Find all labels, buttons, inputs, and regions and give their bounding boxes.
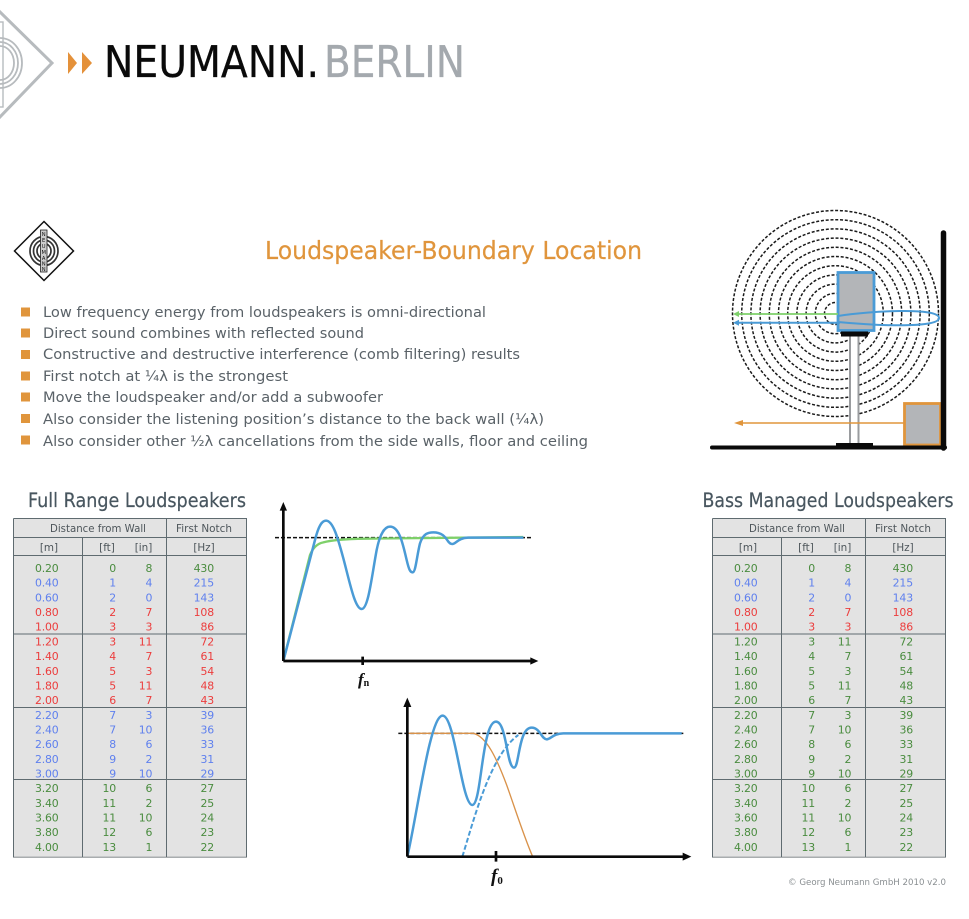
- table: bass managed: 7: [845, 606, 851, 619]
- table: full range: 3: [109, 635, 116, 648]
- table: full range: 2: [109, 606, 116, 619]
- table: full range: 10: [139, 812, 153, 825]
- table: full range: [Hz]: [193, 542, 215, 554]
- brand wordmark: arrows and NEUMANN.BERLIN: NEUMANN.: [104, 37, 319, 88]
- bullet list: Move the loudspeaker and/or add a subwoofer: [43, 389, 383, 406]
- table: bass managed: 11: [838, 679, 851, 692]
- table: full range: 27: [200, 782, 214, 795]
- table: full range: 4: [146, 577, 153, 590]
- table: bass managed: 36: [899, 724, 913, 736]
- table: full range: 4: [109, 650, 116, 663]
- table: bass managed: 2: [845, 797, 851, 810]
- bullet list: Also consider the listening position’s distance to the back wall (¼λ): [43, 411, 544, 428]
- table: full range: 54: [200, 665, 214, 678]
- table: full range: 31: [200, 753, 214, 766]
- table: full range: 8: [146, 562, 153, 575]
- table: full range: 2: [146, 797, 152, 810]
- table: full range: 43: [200, 694, 214, 707]
- table: full range: 1.00: [35, 621, 59, 634]
- table: full range: 0.20: [35, 562, 59, 575]
- table: bass managed: 33: [899, 738, 913, 751]
- table: bass managed: 5: [808, 665, 815, 678]
- table: full range: First Notch: [176, 523, 232, 535]
- table: bass managed: 0: [845, 591, 852, 604]
- table: full range: 12: [102, 826, 116, 839]
- table: bass managed: 3: [845, 621, 852, 634]
- table: bass managed: First Notch: [875, 523, 931, 535]
- bullet list: Low frequency energy from loudspeakers is omni-directional: [43, 304, 486, 321]
- table: full range: 4.00: [35, 841, 59, 854]
- bullet list: First notch at ¼λ is the strongest: [43, 368, 288, 385]
- table: full range: [in]: [135, 542, 152, 554]
- table: bass managed: 2.40: [734, 724, 758, 736]
- table: bass managed: 1.20: [734, 635, 758, 648]
- table: bass managed: 4: [808, 650, 815, 663]
- table: full range: 2.40: [35, 724, 59, 736]
- table: bass managed: 0.40: [734, 577, 758, 590]
- table: full range: 9: [109, 753, 116, 766]
- table: bass managed: 0: [808, 562, 815, 575]
- table: full range: 2.60: [35, 738, 59, 751]
- table: full range: 29: [200, 768, 214, 780]
- table: bass managed: 10: [838, 812, 852, 825]
- table: full range: 2.80: [35, 753, 59, 766]
- table: bass managed: 12: [801, 826, 815, 839]
- table: bass managed: 2.60: [734, 738, 758, 751]
- table: bass managed: 3.60: [734, 812, 758, 825]
- table: full range: 22: [200, 841, 214, 854]
- table: bass managed: 1.40: [734, 650, 758, 663]
- table: bass managed: [Hz]: [892, 542, 914, 554]
- table: full range: 13: [102, 841, 116, 854]
- table: full range: 6: [146, 738, 153, 751]
- table: bass managed: 29: [899, 768, 913, 780]
- table: full range: 3.80: [35, 826, 59, 839]
- table: full range: 1: [146, 841, 152, 854]
- table: full range: 6: [146, 782, 153, 795]
- table: full range: 215: [194, 577, 214, 590]
- table: bass managed: 54: [899, 665, 913, 678]
- diagram: loudspeaker near wall with sound waves: [712, 210, 945, 448]
- table: bass managed: 27: [899, 782, 913, 795]
- table: full range: 7: [109, 724, 116, 736]
- bullet list: [21, 304, 588, 450]
- table: bass managed: 3.80: [734, 826, 758, 839]
- table: full range: 3: [146, 621, 153, 634]
- table: bass managed: [712, 518, 946, 858]
- table: full range: 86: [200, 621, 214, 634]
- table: full range: 1.40: [35, 650, 59, 663]
- table: full range: 1.80: [35, 679, 59, 692]
- table: bass managed: 3.40: [734, 797, 758, 810]
- table: bass managed: 8: [808, 738, 815, 751]
- table: full range: 23: [200, 826, 214, 839]
- table: bass managed: 6: [845, 738, 852, 751]
- table: bass managed: 6: [845, 782, 852, 795]
- table: full range: 36: [200, 724, 214, 736]
- chart: bass managed frequency response with crossover: 0: [497, 875, 503, 887]
- brand logo: large cropped diamond: [0, 10, 52, 119]
- table: full range: 3.00: [35, 768, 59, 780]
- table: bass managed: 2.20: [734, 709, 758, 722]
- table: bass managed: 2: [808, 591, 815, 604]
- table: bass managed: Distance from Wall: [749, 523, 845, 535]
- copyright: © Georg Neumann GmbH 2010 v2.0: [788, 878, 946, 888]
- table: bass managed: 2.80: [734, 753, 758, 766]
- table: full range: 10: [139, 768, 153, 780]
- table: full range: 5: [109, 679, 116, 692]
- table: full range: 0: [146, 591, 153, 604]
- table: bass managed: 25: [899, 797, 913, 810]
- table: bass managed: 86: [899, 621, 913, 634]
- icon: small Neumann diamond logo: N: [42, 262, 46, 268]
- brand wordmark: arrows and NEUMANN.BERLIN: BERLIN: [324, 37, 465, 88]
- table: bass managed: 4.00: [734, 841, 758, 854]
- table: full range: 61: [200, 650, 214, 663]
- chart: full range frequency response: n: [364, 678, 370, 689]
- table: full range: 10: [102, 782, 116, 795]
- table: bass managed: 11: [801, 797, 815, 810]
- table: bass managed: 2: [808, 606, 815, 619]
- table: bass managed: 0.60: [734, 591, 758, 604]
- icon: small Neumann diamond logo: N: [42, 267, 46, 273]
- chart: full range frequency response: [275, 502, 538, 689]
- table: bass managed: 7: [845, 650, 851, 663]
- table: full range: 11: [102, 812, 116, 825]
- table: bass managed: 0.20: [734, 562, 758, 575]
- table: full range: [13, 518, 247, 858]
- table: full range: 0: [109, 562, 116, 575]
- table: full range: 430: [194, 562, 214, 575]
- table: bass managed: 1: [808, 577, 815, 590]
- table: bass managed: 3: [808, 635, 815, 648]
- table: bass managed: 1.00: [734, 621, 758, 634]
- table: full range: 143: [194, 591, 214, 604]
- table: bass managed: 24: [899, 812, 913, 825]
- table: bass managed: 3.00: [734, 768, 758, 780]
- bullet list: Also consider other ½λ cancellations from the side walls, floor and ceiling: [43, 433, 588, 450]
- table: bass managed: 10: [801, 782, 815, 795]
- table: full range: 1: [109, 577, 116, 590]
- heading: full range: Full Range Loudspeakers: [28, 489, 246, 512]
- table: full range: 6: [146, 826, 153, 839]
- bullet list: Direct sound combines with reflected sound: [43, 325, 364, 342]
- brand wordmark: arrows and NEUMANN.BERLIN: [68, 37, 465, 88]
- table: bass managed: 72: [899, 635, 913, 648]
- table: full range: 3: [109, 621, 116, 634]
- table: full range: 72: [200, 635, 214, 648]
- table: full range: 0.60: [35, 591, 59, 604]
- table: full range: 1.60: [35, 665, 59, 678]
- table: full range: 11: [102, 797, 116, 810]
- table: bass managed: 9: [808, 753, 815, 766]
- table: full range: 3: [146, 665, 153, 678]
- table: full range: 39: [200, 709, 214, 722]
- table: bass managed: 10: [838, 768, 852, 780]
- table: bass managed: 23: [899, 826, 913, 839]
- table: full range: 0.40: [35, 577, 59, 590]
- table: bass managed: 7: [845, 694, 851, 707]
- table: bass managed: 3: [845, 665, 852, 678]
- table: bass managed: 3.20: [734, 782, 758, 795]
- table: bass managed: 2: [845, 753, 851, 766]
- table: full range: 33: [200, 738, 214, 751]
- table: bass managed: 11: [801, 812, 815, 825]
- table: full range: 11: [139, 635, 152, 648]
- table: bass managed: 7: [808, 724, 815, 736]
- table: bass managed: 6: [808, 694, 815, 707]
- table: bass managed: 215: [893, 577, 913, 590]
- icon: small Neumann diamond logo: A: [42, 256, 46, 262]
- table: bass managed: 1.60: [734, 665, 758, 678]
- table: full range: 24: [200, 812, 214, 825]
- table: bass managed: 9: [808, 768, 815, 780]
- table: bass managed: 61: [899, 650, 913, 663]
- table: bass managed: 2.00: [734, 694, 758, 707]
- table: full range: 3: [146, 709, 153, 722]
- table: bass managed: 11: [838, 635, 851, 648]
- table: full range: 3.60: [35, 812, 59, 825]
- table: bass managed: 0.80: [734, 606, 758, 619]
- table: bass managed: 43: [899, 694, 913, 707]
- chart: bass managed frequency response with crossover: [398, 698, 691, 887]
- icon: small Neumann diamond logo: U: [42, 244, 46, 250]
- table: bass managed: 430: [893, 562, 913, 575]
- table: bass managed: 3: [845, 709, 852, 722]
- table: bass managed: 48: [899, 679, 913, 692]
- table: bass managed: [m]: [739, 542, 757, 554]
- table: bass managed: 10: [838, 724, 852, 736]
- table: bass managed: 108: [893, 606, 913, 619]
- table: full range: 6: [109, 694, 116, 707]
- icon: small Neumann diamond logo: M: [41, 250, 46, 256]
- table: bass managed: 6: [845, 826, 852, 839]
- table: full range: 48: [200, 679, 214, 692]
- icon: small Neumann diamond logo: E: [42, 238, 45, 244]
- table: full range: 1.20: [35, 635, 59, 648]
- icon: small Neumann diamond logo: N: [42, 232, 46, 238]
- table: full range: 9: [109, 768, 116, 780]
- table: full range: 10: [139, 724, 153, 736]
- table: full range: 3.40: [35, 797, 59, 810]
- table: bass managed: 5: [808, 679, 815, 692]
- chart: bass managed frequency response with crossover: f: [491, 866, 497, 887]
- table: full range: 2.00: [35, 694, 59, 707]
- table: full range: 7: [146, 650, 152, 663]
- table: full range: 7: [146, 606, 152, 619]
- table: full range: 3.20: [35, 782, 59, 795]
- table: bass managed: 143: [893, 591, 913, 604]
- table: full range: 25: [200, 797, 214, 810]
- table: bass managed: 8: [845, 562, 852, 575]
- table: full range: [ft]: [99, 542, 115, 554]
- table: full range: [m]: [40, 542, 58, 554]
- title: Loudspeaker-Boundary Location: [265, 236, 642, 265]
- table: bass managed: 1.80: [734, 679, 758, 692]
- table: full range: 8: [109, 738, 116, 751]
- icon: small Neumann diamond logo: [14, 222, 74, 280]
- table: full range: 5: [109, 665, 116, 678]
- table: bass managed: 7: [808, 709, 815, 722]
- table: bass managed: 13: [801, 841, 815, 854]
- table: bass managed: 1: [845, 841, 851, 854]
- table: full range: 7: [109, 709, 116, 722]
- table: bass managed: 31: [899, 753, 913, 766]
- table: bass managed: 39: [899, 709, 913, 722]
- table: bass managed: 22: [899, 841, 913, 854]
- table: full range: 11: [139, 679, 152, 692]
- table: full range: 7: [146, 694, 152, 707]
- table: bass managed: [in]: [834, 542, 851, 554]
- table: full range: 2.20: [35, 709, 59, 722]
- table: full range: 2: [109, 591, 116, 604]
- table: full range: 108: [194, 606, 214, 619]
- chart: full range frequency response: f: [358, 670, 364, 689]
- table: bass managed: [ft]: [798, 542, 814, 554]
- table: full range: 2: [146, 753, 152, 766]
- bullet list: Constructive and destructive interference (comb filtering) results: [43, 346, 520, 363]
- table: bass managed: 4: [845, 577, 852, 590]
- table: full range: 0.80: [35, 606, 59, 619]
- table: bass managed: 3: [808, 621, 815, 634]
- table: full range: Distance from Wall: [50, 523, 146, 535]
